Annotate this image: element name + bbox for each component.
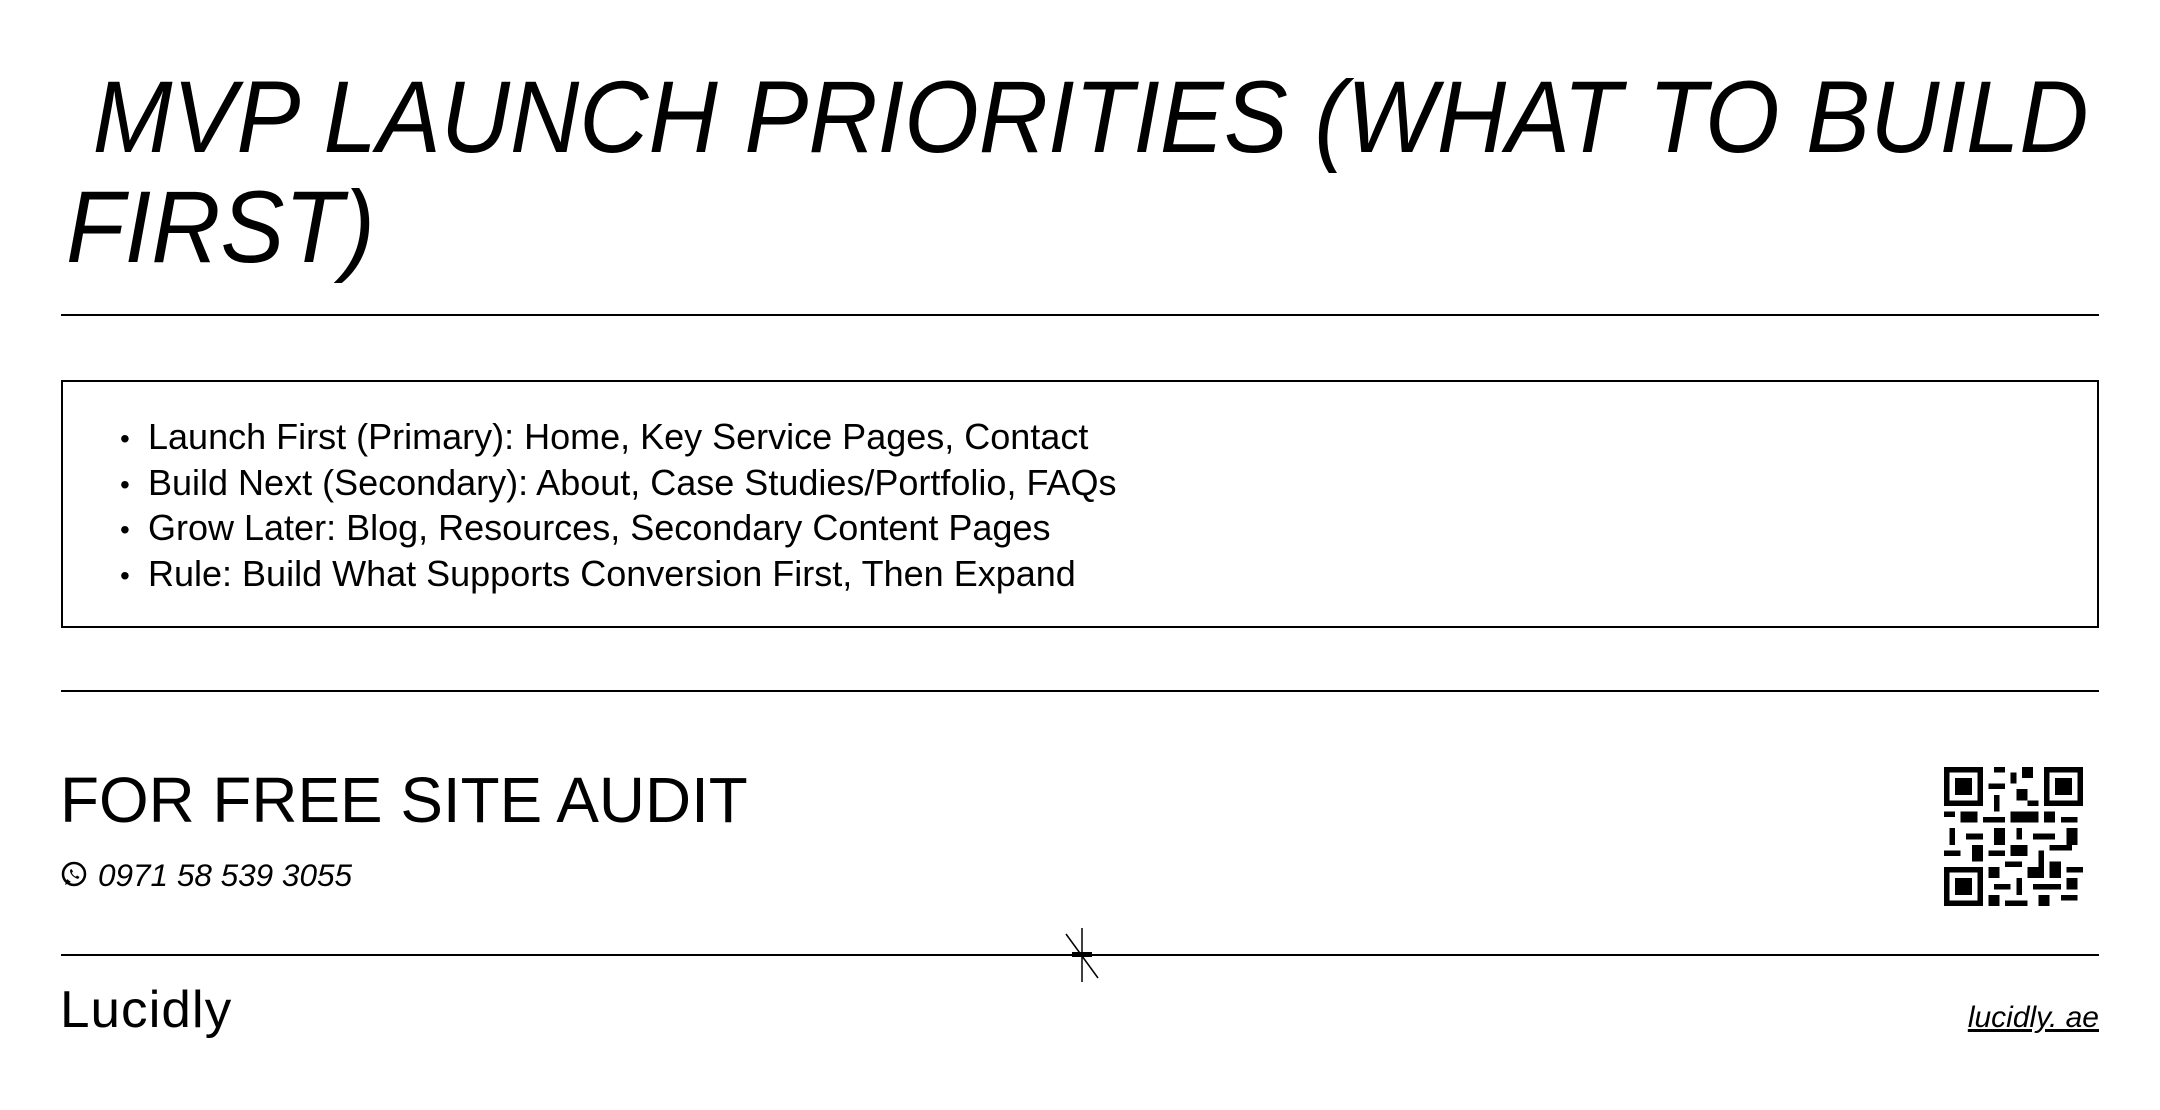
title: FIRST) — [66, 170, 375, 284]
icon: whatsapp — [62, 862, 86, 886]
bullet list: • — [120, 423, 130, 454]
bullet list: Grow Later: Blog, Resources, Secondary Content Pages — [148, 507, 1050, 548]
bullet list — [120, 416, 1116, 594]
icon: QR code — [1944, 767, 2083, 906]
bullet list: Rule: Build What Supports Conversion First, Then Expand — [148, 552, 1076, 594]
bullet list: • — [120, 560, 130, 591]
panel: priorities list — [61, 380, 2099, 628]
bullet list: • — [120, 469, 130, 500]
icon: cross marker — [1066, 928, 1098, 982]
title: MVP LAUNCH PRIORITIES (WHAT TO BUILD — [93, 60, 2089, 174]
title — [66, 60, 2089, 284]
bullet list: Build Next (Secondary): About, Case Studies/Portfolio, FAQs — [148, 462, 1116, 502]
logo: Lucidly: Lucidly — [60, 981, 232, 1039]
bullet list: • — [120, 514, 130, 545]
website link: lucidly. ae — [1968, 1001, 2099, 1034]
phone contact: 0971 58 539 3055 — [98, 857, 352, 893]
heading: call to action: FOR FREE SITE AUDIT — [60, 764, 748, 836]
bullet list: Launch First (Primary): Home, Key Service Pages, Contact — [148, 416, 1088, 457]
